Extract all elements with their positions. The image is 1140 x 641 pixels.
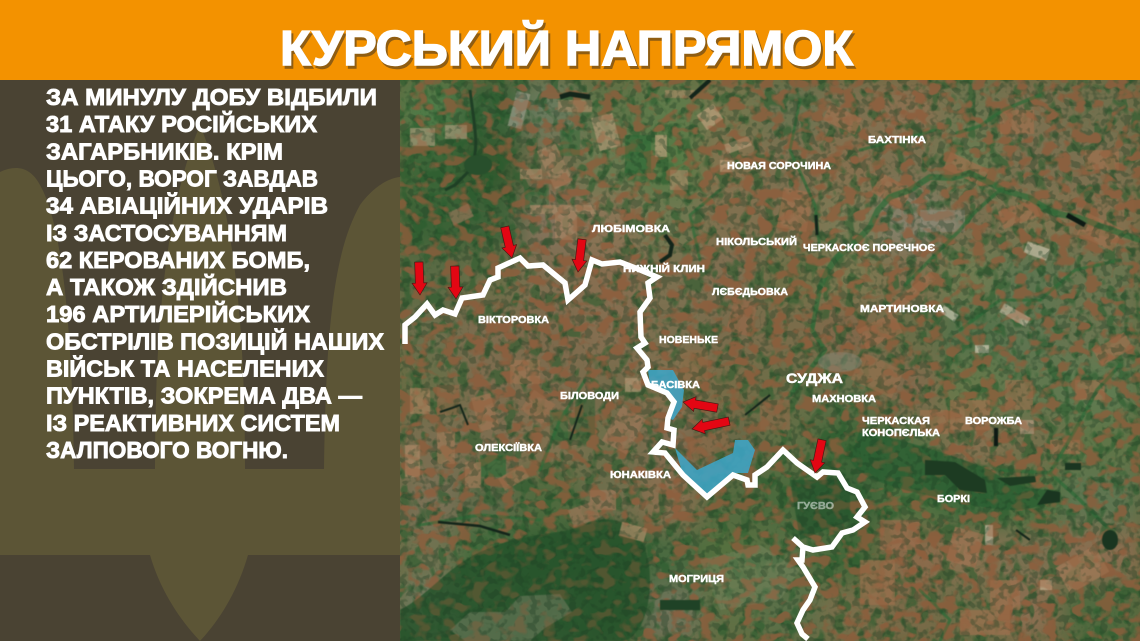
place labels: ЧЕРКАСКАЯ <box>862 415 930 427</box>
place labels: ГУЄВО <box>797 500 834 512</box>
arrow 1 <box>411 262 427 295</box>
place labels: БОРКІ <box>937 493 970 505</box>
place labels: МОГРИЦЯ <box>669 573 724 585</box>
map base colours <box>400 80 1140 641</box>
arrow 4 <box>572 238 588 272</box>
fine mottling over fields and forest <box>400 80 1140 641</box>
place labels: КОНОПЄЛЬКА <box>862 427 940 439</box>
place labels: БАХТІНКА <box>868 134 926 146</box>
field texture <box>400 80 1140 641</box>
text block: daily summary: ІЗ ЗАСТОСУВАННЯМ <box>46 220 287 246</box>
text block: daily summary: ЦЬОГО, ВОРОГ ЗАВДАВ <box>46 166 318 192</box>
place labels: ЛЄБЄДЬОВКА <box>712 286 788 298</box>
text block: daily summary: ВІЙСЬК ТА НАСЕЛЕНИХ <box>46 354 324 382</box>
text block: daily summary: ПУНКТІВ, ЗОКРЕМА ДВА — <box>46 383 362 409</box>
title: КУРСЬКИЙ НАПРЯМОК <box>280 21 853 76</box>
text block: daily summary: 62 КЕРОВАНИХ БОМБ, <box>46 247 310 273</box>
place labels <box>475 134 1022 585</box>
green river valleys <box>420 95 1140 641</box>
agricultural fields <box>405 90 1133 635</box>
streams and dark woodland <box>438 80 1118 610</box>
forests <box>400 430 1060 641</box>
text block: daily summary: 34 АВІАЦІЙНИХ УДАРІВ <box>46 192 328 219</box>
place labels: НОВЕНЬКЕ <box>659 334 718 346</box>
text block: daily summary: 196 АРТИЛЕРІЙСЬКИХ <box>46 300 310 327</box>
border line <box>405 258 865 639</box>
panel: left text panel <box>0 80 400 641</box>
panel: satellite map <box>400 80 1140 641</box>
place labels: ВІКТОРОВКА <box>478 314 549 326</box>
place labels: ВОРОЖБА <box>965 415 1022 427</box>
text block: daily summary <box>46 84 384 463</box>
attack arrows <box>411 225 829 475</box>
place labels: ОЛЕКСІЇВКА <box>475 441 542 454</box>
text block: daily summary: ОБСТРІЛІВ ПОЗИЦІЙ НАШИХ <box>46 327 384 354</box>
arrow 6 <box>692 416 730 434</box>
place labels: МАХНОВКА <box>812 393 876 405</box>
place labels: ЧЕРКАСКОЄ ПОРЄЧНОЄ <box>803 242 936 254</box>
arrow 3 <box>500 226 518 259</box>
text block: daily summary: ЗА МИНУЛУ ДОБУ ВІДБИЛИ <box>46 84 377 110</box>
arrow 7 <box>810 438 826 474</box>
text block: daily summary: ЗАГАРБНИКІВ. КРІМ <box>46 138 283 164</box>
place labels: МАРТИНОВКА <box>860 303 944 315</box>
place labels: НОВАЯ СОРОЧИНА <box>727 160 831 172</box>
arrow 2 <box>447 266 463 299</box>
arrow 5 <box>682 396 719 413</box>
place labels: НІКОЛЬСЬКИЙ <box>716 235 797 248</box>
place labels: БАСІВКА <box>651 379 700 391</box>
header bar <box>0 0 1140 80</box>
text block: daily summary: 31 АТАКУ РОСІЙСЬКИХ <box>46 110 317 137</box>
place labels: БІЛОВОДИ <box>560 390 619 402</box>
text block: daily summary: А ТАКОЖ ЗДІЙСНИВ <box>46 273 287 300</box>
text block: daily summary: ІЗ РЕАКТИВНИХ СИСТЕМ <box>46 410 340 436</box>
occupied area: blue shading <box>648 370 755 495</box>
emblem: trident watermark <box>0 125 400 641</box>
place labels: НИЖНІЙ КЛИН <box>623 262 705 275</box>
place labels: СУДЖА <box>786 370 843 386</box>
place labels: ЮНАКІВКА <box>610 469 671 481</box>
text block: daily summary: ЗАЛПОВОГО ВОГНЮ. <box>46 437 288 463</box>
place labels: ЛЮБІМОВКА <box>592 223 670 235</box>
